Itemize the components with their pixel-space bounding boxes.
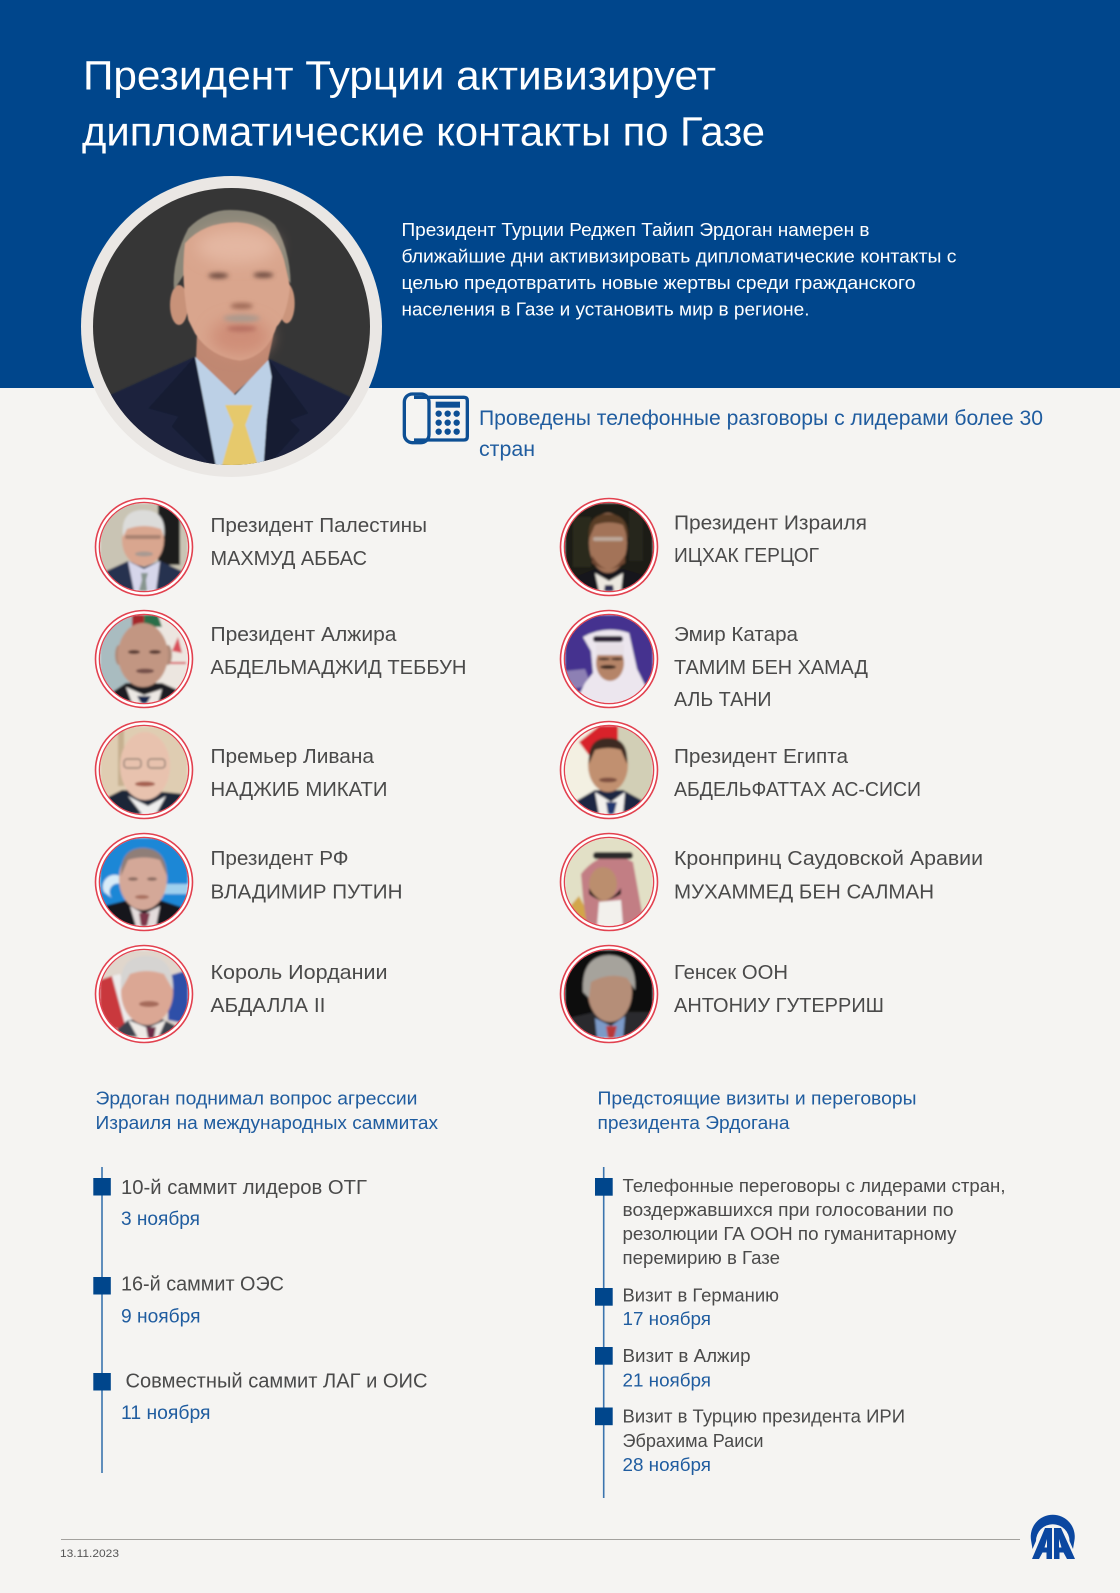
leader text: Tebboune: Президент Алжира	[210, 623, 397, 646]
portrait: Sisi	[560, 722, 658, 818]
visit: Algeria	[595, 1345, 750, 1390]
leader text: Herzog: Президент Израиля	[674, 512, 867, 534]
summit: OTG	[93, 1176, 367, 1230]
intro text: целью предотвратить новые жертвы среди гражданского	[402, 272, 916, 293]
leader text: Mikati: НАДЖИБ МИКАТИ	[210, 778, 388, 801]
nose shadow	[230, 303, 253, 309]
visit: phone talks: перемирию в Газе	[622, 1247, 780, 1268]
summit: ECO: 9 ноября	[121, 1306, 200, 1328]
leader text: Guterres: Генсек ООН	[674, 961, 788, 984]
leader text: Tamim	[674, 623, 868, 711]
leader text: Abdullah II	[210, 961, 388, 1017]
visit: Raisi to Turkey: 28 ноября	[622, 1454, 711, 1475]
leader text: Tamim: ТАМИМ БЕН ХАМАД	[674, 656, 868, 679]
portrait: Mikati	[96, 722, 192, 818]
leader: Mikati	[96, 722, 388, 818]
portrait: Erdogan	[81, 176, 382, 493]
title: дипломатические контакты по Газе	[82, 108, 765, 154]
leader text: Tebboune: АБДЕЛЬМАДЖИД ТЕББУН	[210, 656, 466, 679]
portrait: Tebboune	[96, 610, 192, 708]
leader: Mohammed bin Salman	[560, 834, 983, 930]
heading: summits: Эрдоган поднимал вопрос агрессии	[96, 1088, 418, 1108]
portrait: Abdullah II	[96, 946, 192, 1042]
summit: LAS and OIC	[93, 1370, 428, 1424]
visit: Raisi to Turkey: Визит в Турцию президента ИРИ	[622, 1406, 905, 1426]
header band	[0, 0, 1120, 388]
leader: Guterres	[560, 946, 884, 1042]
leader: Tebboune	[96, 610, 466, 708]
leader text: Tebboune	[210, 623, 466, 679]
leader text: Putin: ВЛАДИМИР ПУТИН	[210, 880, 402, 904]
intro text: Президент Турции Реджеп Тайип Эрдоган намерен в	[402, 219, 870, 240]
leader: Tamim	[560, 610, 868, 711]
leader text: Tamim: Эмир Катара	[674, 623, 799, 646]
timeline: summits	[93, 1167, 428, 1473]
visit: Germany: Визит в Германию	[622, 1284, 779, 1306]
leader text: Abbas	[210, 514, 427, 570]
leader text: Tamim: АЛЬ ТАНИ	[674, 688, 772, 711]
visit: Algeria: Визит в Алжир	[622, 1345, 750, 1366]
leader text: Putin	[210, 847, 402, 904]
leader text: Herzog: ИЦХАК ГЕРЦОГ	[674, 544, 819, 567]
leader text: Guterres	[674, 961, 884, 1017]
portrait: Abbas	[96, 498, 192, 596]
visit: phone talks: резолюции ГА ООН по гуманитарному	[622, 1223, 957, 1244]
leader text: Abbas: Президент Палестины	[210, 514, 427, 537]
phone calls caption: стран	[479, 438, 535, 461]
portrait: Herzog	[560, 498, 658, 596]
moustache	[223, 315, 260, 322]
visit: Raisi to Turkey: Эбрахима Раиси	[622, 1430, 764, 1451]
summit: OTG: 3 ноября	[121, 1209, 200, 1230]
leader text: Abbas: МАХМУД АББАС	[210, 547, 367, 570]
logo: Anadolu Agency	[1031, 1515, 1075, 1559]
phone calls caption: Проведены телефонные разговоры с лидерами более 30	[479, 407, 1043, 430]
leader text: Mohammed bin Salman	[674, 847, 983, 904]
portrait: Tamim	[560, 610, 658, 708]
eyes	[208, 273, 228, 278]
intro text	[402, 219, 956, 320]
visit: Germany	[595, 1284, 779, 1329]
summit: LAS and OIC: Совместный саммит ЛАГ и ОИС	[126, 1370, 428, 1392]
heading: summits	[96, 1088, 439, 1133]
summit: ECO	[93, 1272, 284, 1328]
leader text: Sisi: АБДЕЛЬФАТТАХ АС-СИСИ	[674, 778, 921, 801]
date: 13.11.2023	[60, 1548, 119, 1560]
intro text: ближайшие дни активизировать дипломатические контакты с	[402, 246, 956, 266]
title	[82, 52, 765, 154]
summit: OTG: 10-й саммит лидеров ОТГ	[121, 1176, 367, 1199]
portrait: Guterres	[560, 946, 658, 1042]
heading: summits: Израиля на международных саммитах	[96, 1112, 439, 1133]
leader text: Abdullah II: Король Иордании	[210, 961, 388, 984]
leader: Abbas	[96, 498, 427, 596]
leader: Putin	[96, 834, 402, 930]
face shading	[197, 230, 277, 263]
leader text: Mohammed bin Salman: Кронпринц Саудовской Аравии	[674, 847, 983, 870]
leader text: Abdullah II: АБДАЛЛА II	[210, 994, 326, 1017]
heading: upcoming visits	[598, 1088, 916, 1133]
summit: LAS and OIC: 11 ноября	[121, 1403, 210, 1424]
visit: Germany: 17 ноября	[622, 1308, 711, 1329]
leader text: Sisi	[674, 745, 921, 801]
footer rule	[61, 1538, 1020, 1540]
leader text: Guterres: АНТОНИУ ГУТЕРРИШ	[674, 994, 884, 1017]
visit: Raisi to Turkey	[595, 1406, 905, 1475]
leader text: Herzog	[674, 512, 867, 567]
visit: Algeria: 21 ноября	[622, 1370, 711, 1390]
leader text: Mikati	[210, 745, 388, 801]
heading: upcoming visits: президента Эрдогана	[598, 1112, 790, 1133]
visit: phone talks: Телефонные переговоры с лидерами стран,	[622, 1175, 1006, 1196]
title: Президент Турции активизирует	[83, 52, 716, 98]
leader text: Mohammed bin Salman: МУХАММЕД БЕН САЛМАН	[674, 880, 934, 904]
leader: Abdullah II	[96, 946, 388, 1042]
summit: ECO: 16-й саммит ОЭС	[121, 1272, 284, 1296]
intro text: населения в Газе и установить мир в регионе.	[402, 298, 810, 320]
leader: Herzog	[560, 498, 867, 596]
heading: upcoming visits: Предстоящие визиты и переговоры	[598, 1088, 916, 1108]
leader text: Mikati: Премьер Ливана	[210, 745, 375, 768]
icon: telephone	[404, 394, 467, 443]
phone calls caption	[479, 407, 1043, 461]
portrait: Putin	[96, 834, 192, 930]
portrait: Mohammed bin Salman	[560, 834, 658, 930]
visit: phone talks	[595, 1175, 1006, 1268]
leader: Sisi	[560, 722, 921, 818]
leader text: Putin: Президент РФ	[210, 847, 348, 870]
visit: phone talks: воздержавшихся при голосовании по	[622, 1199, 954, 1220]
timeline: upcoming visits	[595, 1167, 1006, 1498]
leader text: Sisi: Президент Египта	[674, 745, 849, 768]
